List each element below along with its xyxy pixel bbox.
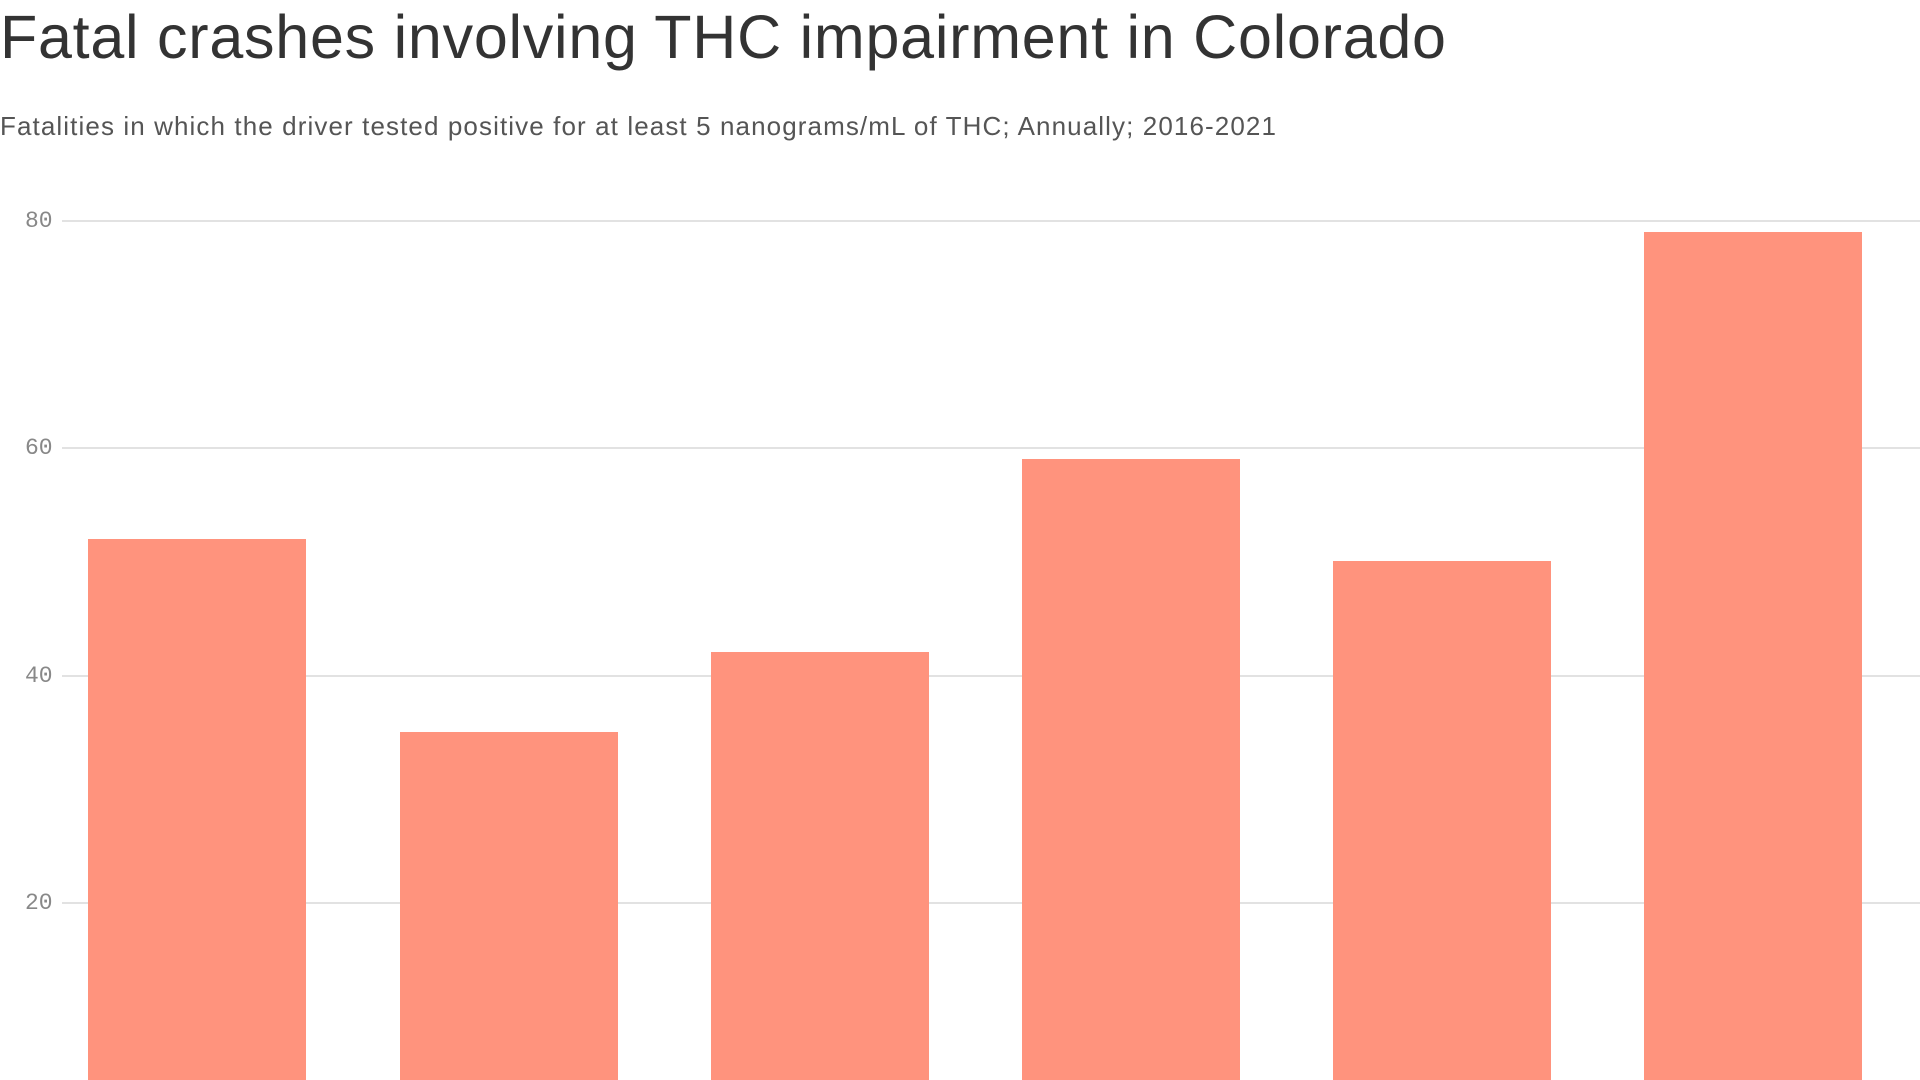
y-axis labels: 60 (25, 435, 53, 461)
subtitle: Fatalities in which the driver tested positive for at least 5 nanograms/mL of THC; Annually; 2016-2021 (0, 111, 1277, 141)
y-axis labels: 40 (25, 663, 53, 689)
bar: 2018 (42) (711, 652, 929, 1080)
y-axis labels: 80 (25, 208, 53, 234)
bar: 2016 (52) (88, 539, 306, 1080)
title: Fatal crashes involving THC impairment in Colorado (0, 3, 1447, 71)
bar: 2020 (50) (1333, 561, 1551, 1080)
y-axis labels (25, 208, 53, 916)
bar: 2019 (59) (1022, 459, 1240, 1080)
bar: 2021 (79) (1644, 232, 1862, 1080)
y-axis labels: 20 (25, 890, 53, 916)
bar: 2017 (35) (400, 732, 618, 1080)
